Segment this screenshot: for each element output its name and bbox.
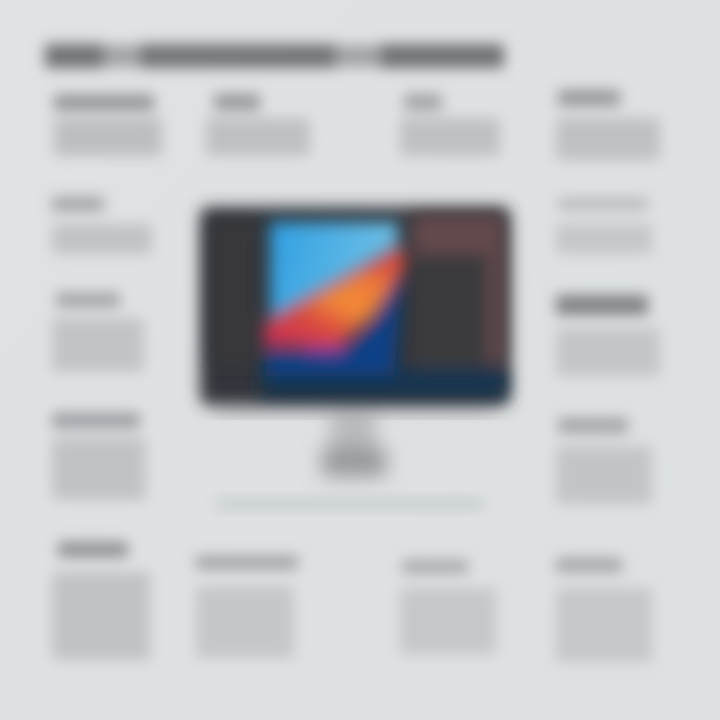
- text block: left column, item 4: [52, 542, 150, 660]
- screen: side panels and footer band: [212, 214, 506, 396]
- text block: bottom row, column 2: [196, 556, 298, 658]
- text block: top row, column 1: [54, 95, 162, 156]
- text block: left column, item 1: [52, 197, 152, 254]
- text block: top row, column 4: [556, 90, 660, 160]
- monitor shadow: [215, 400, 495, 414]
- icon: monitor stand: [322, 402, 386, 476]
- text block: right column, item 1: [556, 198, 652, 254]
- text block: bottom row, column 4: [556, 558, 652, 662]
- text block: left column, item 2: [52, 293, 144, 372]
- text block: bottom row, column 3: [400, 560, 496, 654]
- text block: right column, item 2: [556, 295, 660, 376]
- text block: top row, column 3: [400, 94, 500, 156]
- text block: left column, item 3: [52, 413, 146, 500]
- text block: top row, column 2: [206, 94, 310, 156]
- title: [44, 44, 504, 68]
- monitor: [200, 207, 510, 405]
- chart on screen: colored gradient area: [264, 222, 406, 376]
- text block: right column, item 3: [556, 418, 652, 504]
- monitor body: [200, 207, 510, 405]
- caption under monitor: [216, 498, 484, 510]
